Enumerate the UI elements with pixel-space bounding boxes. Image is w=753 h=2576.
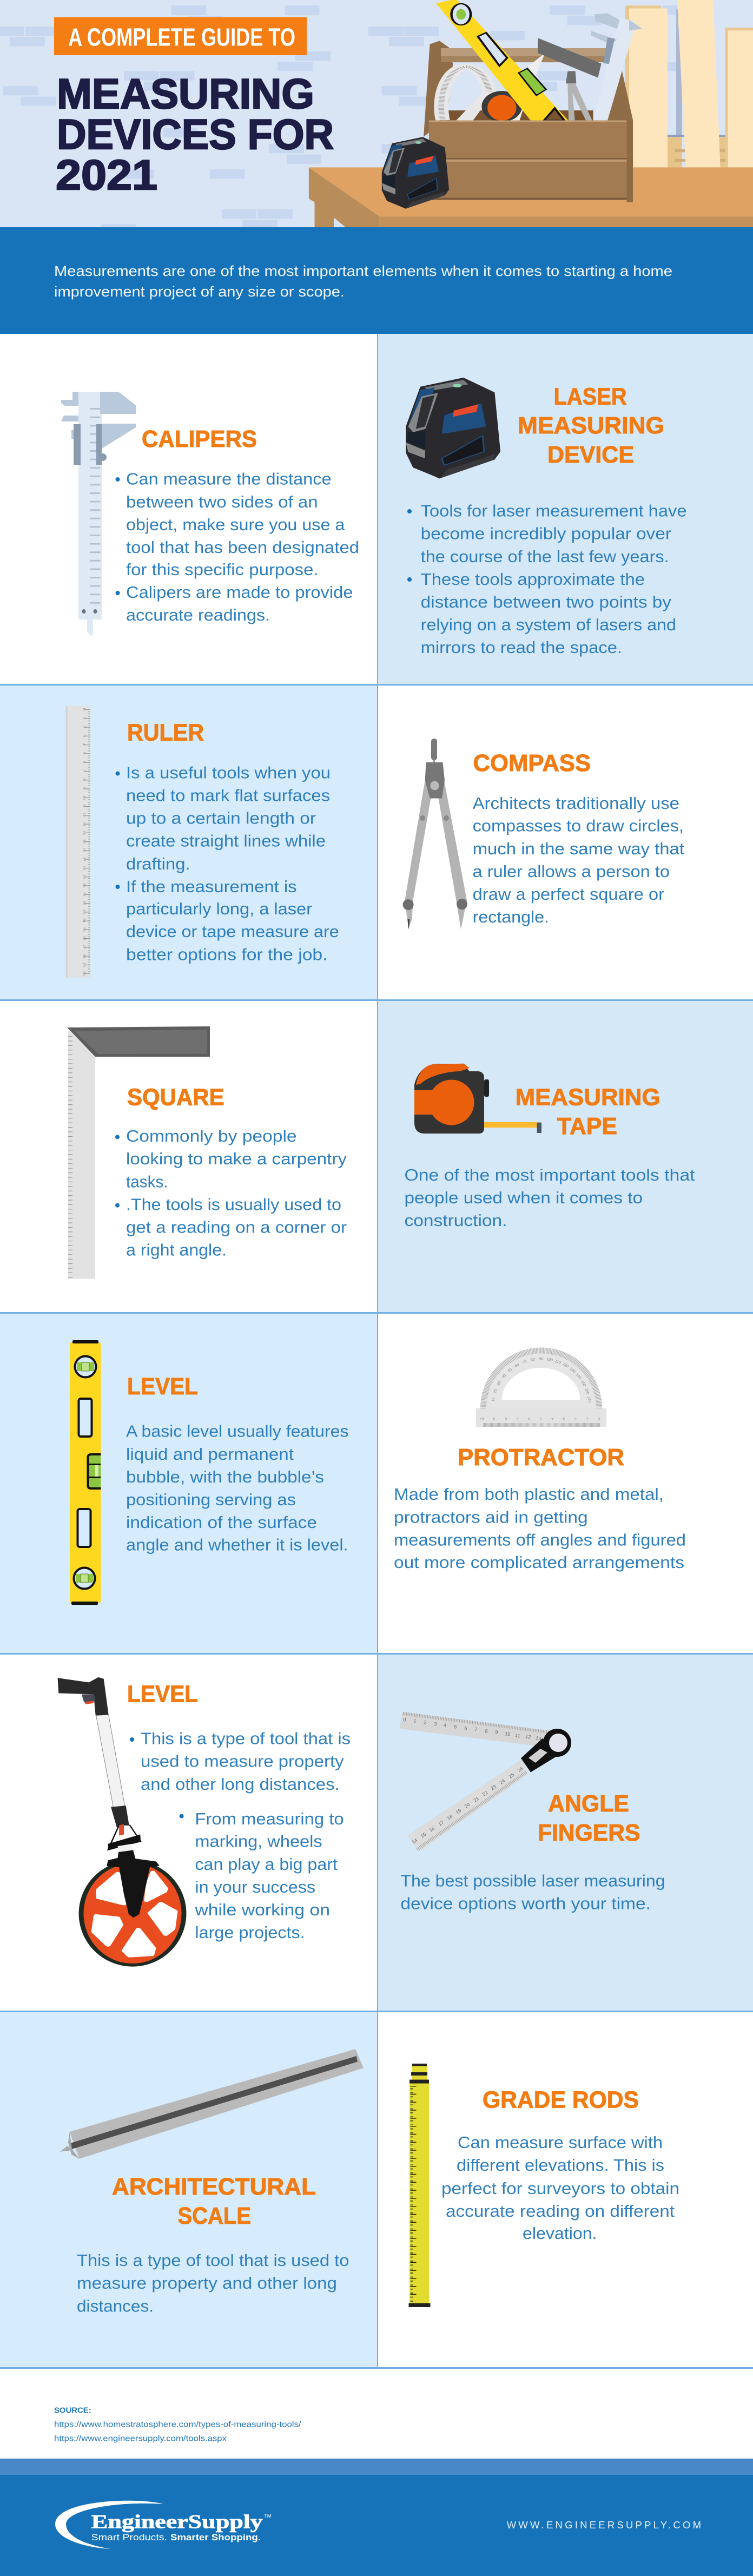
text: level description: indication of the surface: [126, 1513, 317, 1532]
icon: angle finger ruler: 25: [508, 1772, 515, 1780]
text: measuring tape description: One of the most important tools that: [405, 1165, 695, 1184]
text: measuring tape description: construction.: [405, 1211, 507, 1230]
heading: laser measuring device: LASER: [554, 383, 627, 410]
icon: protractor: 9: [493, 1417, 495, 1420]
icon: angle finger ruler: 9: [495, 1729, 498, 1735]
text: calipers bullets: object, make sure you use a: [126, 515, 345, 534]
icon: measuring wheel: [58, 1677, 186, 1967]
heading: architectural scale: [112, 2173, 316, 2229]
sources: https://www.homestratosphere.com/types-of-measuring-tools/: [54, 2420, 302, 2429]
logo: EngineerSupply: EngineerSupply: [91, 2511, 263, 2533]
text: protractor description: [394, 1485, 686, 1572]
text: square bullets: .The tools is usually used to: [126, 1195, 341, 1214]
text: ruler bullets: If the measurement is: [126, 877, 297, 896]
icon: angle finger ruler: 18: [446, 1814, 453, 1821]
icon: protractor: 0: [598, 1417, 600, 1420]
panel: level: [0, 1313, 378, 1653]
heading: laser measuring device: MEASURING: [518, 412, 664, 439]
footer: [0, 2459, 753, 2576]
text: ruler bullets: Is a useful tools when you: [126, 763, 331, 782]
text: wheel bullets: From measuring to: [195, 1809, 344, 1828]
icon: architectural scale: [60, 2049, 364, 2159]
heading: measuring tape: MEASURING: [516, 1084, 660, 1110]
text: wheel bullets: large projects.: [195, 1923, 305, 1942]
icon: protractor: 140: [575, 1373, 582, 1380]
text: grade rods description: [441, 2133, 679, 2243]
text: compass description: Architects traditionally use: [473, 794, 679, 813]
icon: ruler: 6: [82, 761, 85, 763]
text: ruler bullets: drafting.: [126, 854, 190, 873]
text: square bullets: a right angle.: [126, 1241, 227, 1260]
icon: ruler: 26: [82, 936, 85, 940]
heading: angle fingers: [538, 1790, 640, 1846]
icon: ruler: 22: [82, 901, 85, 905]
heading: angle fingers: FINGERS: [538, 1820, 640, 1846]
text: protractor description: protractors aid in getting: [394, 1507, 588, 1527]
title: DEVICES FOR: [57, 110, 334, 158]
website url: WWW.ENGINEERSUPPLY.COM: [507, 2519, 701, 2531]
icon: angle finger ruler: 11: [515, 1732, 520, 1738]
sources: https://www.engineersupply.com/tools.aspx: [54, 2434, 227, 2443]
icon: protractor: 10: [491, 1397, 496, 1402]
text: architectural scale description: distances.: [77, 2296, 154, 2315]
text: compass description: draw a perfect square or: [473, 885, 664, 904]
icon: protractor: 20: [493, 1389, 498, 1394]
text: square bullets: looking to make a carpentry: [126, 1149, 347, 1168]
text: angle fingers description: [400, 1872, 665, 1913]
heading: level: LEVEL: [127, 1373, 198, 1400]
icon: protractor: 170: [586, 1396, 591, 1403]
text: square bullets: get a reading on a corner or: [126, 1218, 347, 1237]
text: compass description: [473, 794, 684, 926]
heading: ruler: RULER: [127, 720, 204, 746]
icon: protractor: 150: [580, 1380, 586, 1387]
icon: protractor: 6: [528, 1417, 530, 1420]
icon: grade rod: [409, 2064, 431, 2307]
heading: architectural scale: SCALE: [177, 2203, 251, 2229]
heading: measuring tape: [516, 1084, 660, 1139]
icon: ruler: 23: [82, 910, 85, 914]
icon: angle finger ruler: 7: [474, 1727, 478, 1732]
text: wheel bullets: can play a big part: [195, 1855, 338, 1874]
icon: protractor: 100: [546, 1358, 553, 1362]
icon: ruler: 30: [82, 971, 85, 976]
icon: ruler: 13: [82, 822, 85, 826]
text: grade rods description: elevation.: [523, 2224, 597, 2243]
icon: protractor: 60: [514, 1363, 520, 1368]
icon: protractor: 2: [574, 1417, 577, 1420]
text: ruler bullets: need to mark flat surfaces: [126, 786, 330, 805]
text: calipers bullets: [116, 470, 359, 624]
icon: angle finger ruler: 1: [413, 1718, 417, 1724]
title: MEASURING: [57, 70, 314, 117]
text: level description: angle and whether it is level.: [126, 1536, 348, 1554]
text: wheel bullets: in your success: [195, 1877, 315, 1896]
icon: ruler: 24: [82, 918, 85, 923]
icon: angle finger ruler: 20: [464, 1802, 471, 1809]
icon: angle finger ruler: 2: [424, 1719, 427, 1725]
text: laser bullets: distance between two points by: [421, 592, 672, 611]
text: protractor description: out more complicated arrangements: [394, 1553, 684, 1572]
icon: ruler: 1: [82, 717, 85, 719]
text: angle fingers description: device options worth your time.: [400, 1894, 651, 1913]
icon: ruler: 17: [82, 857, 85, 861]
icon: protractor: 7: [516, 1417, 518, 1420]
icon: ruler: 8: [82, 779, 85, 781]
text: wheel bullets: marking, wheels: [195, 1831, 322, 1850]
text: square bullets: [115, 1126, 347, 1260]
icon: ruler: 5: [82, 752, 85, 754]
logo: EngineerSupply: Smart Products.: [91, 2532, 167, 2542]
icon: protractor: 4: [551, 1417, 553, 1420]
icon: measuring tape: [414, 1064, 541, 1134]
icon: angle finger ruler: 10: [505, 1731, 511, 1737]
icon: protractor: 90: [539, 1358, 543, 1361]
panel: ruler: [0, 684, 378, 1000]
text: wheel bullets: used to measure property: [141, 1752, 344, 1770]
icon: protractor: 40: [501, 1374, 507, 1379]
text: protractor description: measurements off angles and figured: [394, 1530, 686, 1550]
icon: angle finger ruler: 21: [473, 1796, 480, 1803]
icon: ruler: 21: [82, 892, 85, 897]
panel: protractor: [378, 1313, 753, 1653]
logo: EngineerSupply: [55, 2501, 272, 2549]
text: level description: bubble, with the bubble’s: [126, 1467, 324, 1486]
icon: ruler: 12: [82, 813, 85, 817]
panel: angle fingers: [378, 1653, 753, 2012]
sources: [54, 2406, 302, 2443]
icon: angle finger ruler: 17: [438, 1820, 445, 1827]
heading: calipers: CALIPERS: [142, 426, 257, 452]
panel: measuring wheel: [0, 1653, 378, 2012]
icon: angle finger ruler: 12: [525, 1734, 531, 1740]
icon: square: [67, 1026, 210, 1279]
title: 2021: [56, 151, 157, 199]
text: laser bullets: [407, 502, 687, 657]
text: ruler bullets: [116, 763, 339, 964]
icon: ruler: 7: [82, 770, 85, 772]
panel: calipers: [0, 334, 378, 684]
icon: ruler: 9: [82, 787, 85, 789]
heading: protractor: PROTRACTOR: [458, 1444, 624, 1471]
icon: angle finger ruler: 0: [403, 1717, 406, 1723]
icon: ruler: 29: [82, 963, 85, 967]
text: calipers bullets: for this specific purpose.: [126, 560, 319, 579]
heading: compass: COMPASS: [473, 750, 591, 776]
icon: ruler: 0: [82, 708, 85, 710]
icon: ruler: 16: [82, 848, 85, 852]
sources: SOURCE:: [54, 2406, 91, 2415]
icon: ruler: 18: [82, 866, 85, 870]
text: compass description: much in the same way that: [473, 839, 684, 858]
icon: protractor: 120: [562, 1362, 569, 1369]
icon: protractor: 50: [507, 1368, 513, 1373]
text: ruler bullets: create straight lines while: [126, 832, 326, 851]
icon: protractor: 160: [584, 1388, 590, 1395]
text: laser bullets: Tools for laser measurement have: [421, 502, 687, 521]
text: calipers bullets: between two sides of an: [126, 492, 318, 511]
icon: ruler: 15: [82, 839, 85, 844]
tag: a complete guide to: A COMPLETE GUIDE TO: [68, 23, 295, 51]
icon: ruler: [66, 706, 90, 978]
text: square bullets: Commonly by people: [126, 1126, 297, 1145]
heading: architectural scale: ARCHITECTURAL: [112, 2173, 316, 2200]
text: architectural scale description: measure property and other long: [77, 2274, 337, 2292]
panel: measuring tape: [378, 1000, 753, 1313]
icon: protractor: 10: [480, 1417, 485, 1420]
icon: protractor: 110: [554, 1359, 562, 1365]
grid lines: [0, 334, 753, 2369]
icon: angle finger ruler: 14: [411, 1837, 418, 1845]
icon: protractor: 30: [497, 1381, 502, 1386]
icon: protractor: 8: [505, 1417, 507, 1420]
text: architectural scale description: [77, 2251, 349, 2315]
text: compass description: a ruler allows a person to: [473, 862, 670, 881]
icon: protractor: [476, 1348, 606, 1427]
icon: compass: [403, 739, 467, 930]
icon: angle finger ruler: 5: [454, 1724, 457, 1730]
icon: protractor: 5: [539, 1417, 541, 1420]
text: compass description: rectangle.: [473, 907, 549, 926]
icon: ruler: 25: [82, 927, 85, 932]
logo: EngineerSupply: Smarter Shopping.: [170, 2532, 261, 2542]
title: [56, 70, 334, 199]
icon: protractor: 1: [586, 1417, 588, 1420]
text: calipers bullets: Calipers are made to provide: [126, 583, 353, 602]
icon: angle finger ruler: 26: [517, 1766, 524, 1774]
logo: EngineerSupply: TM: [264, 2513, 272, 2519]
text: wheel bullets: This is a type of tool that is: [141, 1729, 351, 1748]
tag: a complete guide to: [54, 17, 307, 55]
text: calipers bullets: accurate readings.: [126, 605, 270, 624]
icon: laser device: [406, 378, 500, 478]
text: angle fingers description: The best possible laser measuring: [400, 1872, 665, 1890]
text: level description: positioning serving as: [126, 1490, 296, 1509]
text: laser bullets: relying on a system of lasers and: [421, 615, 676, 634]
text: wheel bullets: while working on: [194, 1900, 330, 1919]
intro band: [0, 227, 753, 334]
text: ruler bullets: device or tape measure are: [126, 922, 339, 941]
heading: grade rods: GRADE RODS: [483, 2087, 639, 2113]
icon: ruler: 14: [82, 831, 85, 835]
text: compass description: compasses to draw circles,: [473, 816, 684, 835]
icon: ruler: 19: [82, 874, 85, 879]
heading: laser measuring device: DEVICE: [547, 442, 634, 468]
panel: compass: [378, 684, 753, 1000]
panel: grade rods: [378, 2012, 753, 2368]
text: laser bullets: become incredibly popular over: [421, 524, 671, 543]
icon: angle finger ruler: 23: [490, 1784, 497, 1791]
text: measuring tape description: people used when it comes to: [405, 1188, 643, 1207]
intro band: Measurements are one of the most important elements when it comes to starting a home: [54, 263, 672, 279]
icon: ruler: 2: [82, 726, 85, 728]
icon: spirit level: [70, 1340, 101, 1605]
text: square bullets: tasks.: [126, 1172, 168, 1191]
icon: angle finger ruler: [400, 1712, 571, 1852]
text: wheel bullets: [130, 1729, 351, 1942]
icon: protractor: 130: [569, 1367, 576, 1374]
icon: angle finger ruler: 6: [464, 1725, 467, 1731]
text: grade rods description: accurate reading on different: [446, 2202, 675, 2221]
icon: ruler: 11: [82, 804, 85, 808]
icon: calipers: [61, 392, 136, 636]
text: wheel bullets: and other long distances.: [141, 1775, 340, 1794]
heading: level: LEVEL: [127, 1681, 198, 1707]
hero illustration: brick wall, toolbox and table: [0, 0, 753, 227]
icon: ruler: 4: [82, 743, 85, 746]
icon: angle finger ruler: 24: [499, 1778, 506, 1786]
hero header panel: [0, 0, 753, 227]
panel: square: [0, 1000, 378, 1313]
icon: angle finger ruler: 22: [481, 1790, 488, 1797]
heading: laser measuring device: [518, 383, 664, 468]
panel: architectural scale: [0, 2012, 378, 2368]
text: grade rods description: different elevations. This is: [457, 2156, 664, 2175]
text: measuring tape description: [405, 1165, 695, 1230]
icon: ruler: 20: [82, 883, 85, 887]
text: level description: A basic level usually features: [126, 1422, 348, 1441]
icon: ruler: 10: [82, 795, 85, 800]
heading: angle fingers: ANGLE: [548, 1790, 629, 1817]
text: ruler bullets: up to a certain length or: [126, 809, 316, 828]
text: laser bullets: the course of the last few years.: [421, 547, 669, 566]
text: architectural scale description: This is a type of tool that is used to: [77, 2251, 349, 2270]
text: grade rods description: Can measure surface with: [458, 2133, 663, 2152]
icon: protractor: 80: [530, 1358, 535, 1362]
heading: square: SQUARE: [127, 1084, 224, 1110]
icon: protractor: 70: [522, 1360, 527, 1365]
text: calipers bullets: tool that has been designated: [126, 538, 359, 557]
heading: measuring tape: TAPE: [557, 1113, 617, 1139]
text: grade rods description: perfect for surveyors to obtain: [441, 2179, 679, 2198]
icon: ruler: 28: [82, 954, 85, 958]
text: laser bullets: These tools approximate the: [421, 570, 645, 589]
icon: ruler: 27: [82, 945, 85, 949]
icon: protractor: 3: [563, 1417, 565, 1420]
text: laser bullets: mirrors to read the space.: [421, 638, 622, 657]
text: level description: liquid and permanent: [126, 1445, 294, 1464]
text: level description: [126, 1422, 348, 1554]
text: ruler bullets: better options for the job.: [126, 945, 328, 964]
icon: angle finger ruler: 13: [536, 1735, 541, 1741]
icon: angle finger ruler: 15: [420, 1831, 427, 1839]
text: calipers bullets: Can measure the distance: [126, 470, 332, 489]
icon: angle finger ruler: 3: [434, 1721, 437, 1727]
icon: angle finger ruler: 16: [428, 1826, 435, 1833]
panel: laser measuring device: [378, 334, 753, 684]
text: ruler bullets: particularly long, a laser: [126, 899, 312, 918]
icon: ruler: 3: [82, 735, 85, 737]
intro band: improvement project of any size or scope.: [54, 284, 345, 300]
icon: angle finger ruler: 19: [455, 1808, 462, 1815]
icon: angle finger ruler: 8: [485, 1728, 488, 1734]
text: protractor description: Made from both plastic and metal,: [394, 1485, 664, 1504]
icon: angle finger ruler: 4: [444, 1722, 447, 1728]
